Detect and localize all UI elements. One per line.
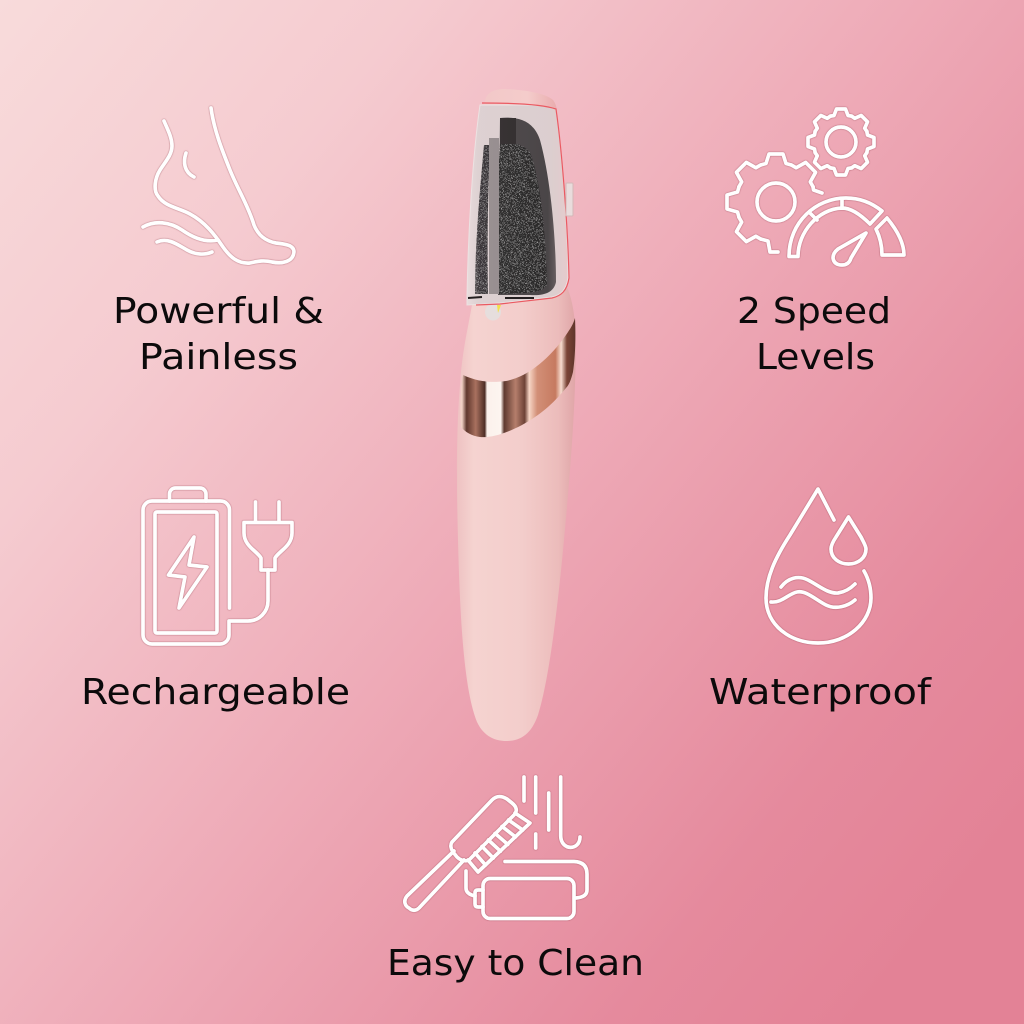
large gear [727,154,822,252]
heading: Powerful & Painless: Powerful & [113,291,324,332]
heading: 2 Speed Levels: Levels [756,337,875,378]
heading: 2 Speed Levels [737,291,891,378]
icon: brush and roller [405,777,587,918]
feature: rechargeable [81,488,350,713]
gauge [789,198,882,256]
small gear [808,109,874,175]
roller left part [475,145,490,294]
product: callus remover device [457,89,576,741]
cap [480,89,557,114]
icon: foot [143,108,294,263]
heading: Powerful & Painless [113,291,324,378]
feature: waterproof [709,489,932,713]
feature: 2 speed levels [727,109,904,378]
heading: Powerful & Painless: Painless [139,337,298,378]
roller back [498,118,556,295]
feature: easy to clean [387,777,644,984]
LED [485,304,501,320]
heading: 2 Speed Levels: 2 Speed [737,291,891,332]
rose gold band [460,318,575,437]
clear cover and roller [467,103,573,305]
icon: battery and plug [143,488,292,644]
heading: Rechargeable: Rechargeable [81,672,350,713]
heading: Easy to Clean: Easy to Clean [387,943,644,984]
side clip [566,183,573,216]
icon: water drops [766,489,871,643]
abrasive roller [497,143,547,294]
icon: gears and gauge [727,109,904,265]
red edge line [476,103,569,305]
heading: Waterproof: Waterproof [709,672,932,713]
feature: powerful and painless [113,108,324,378]
device body [457,285,576,741]
